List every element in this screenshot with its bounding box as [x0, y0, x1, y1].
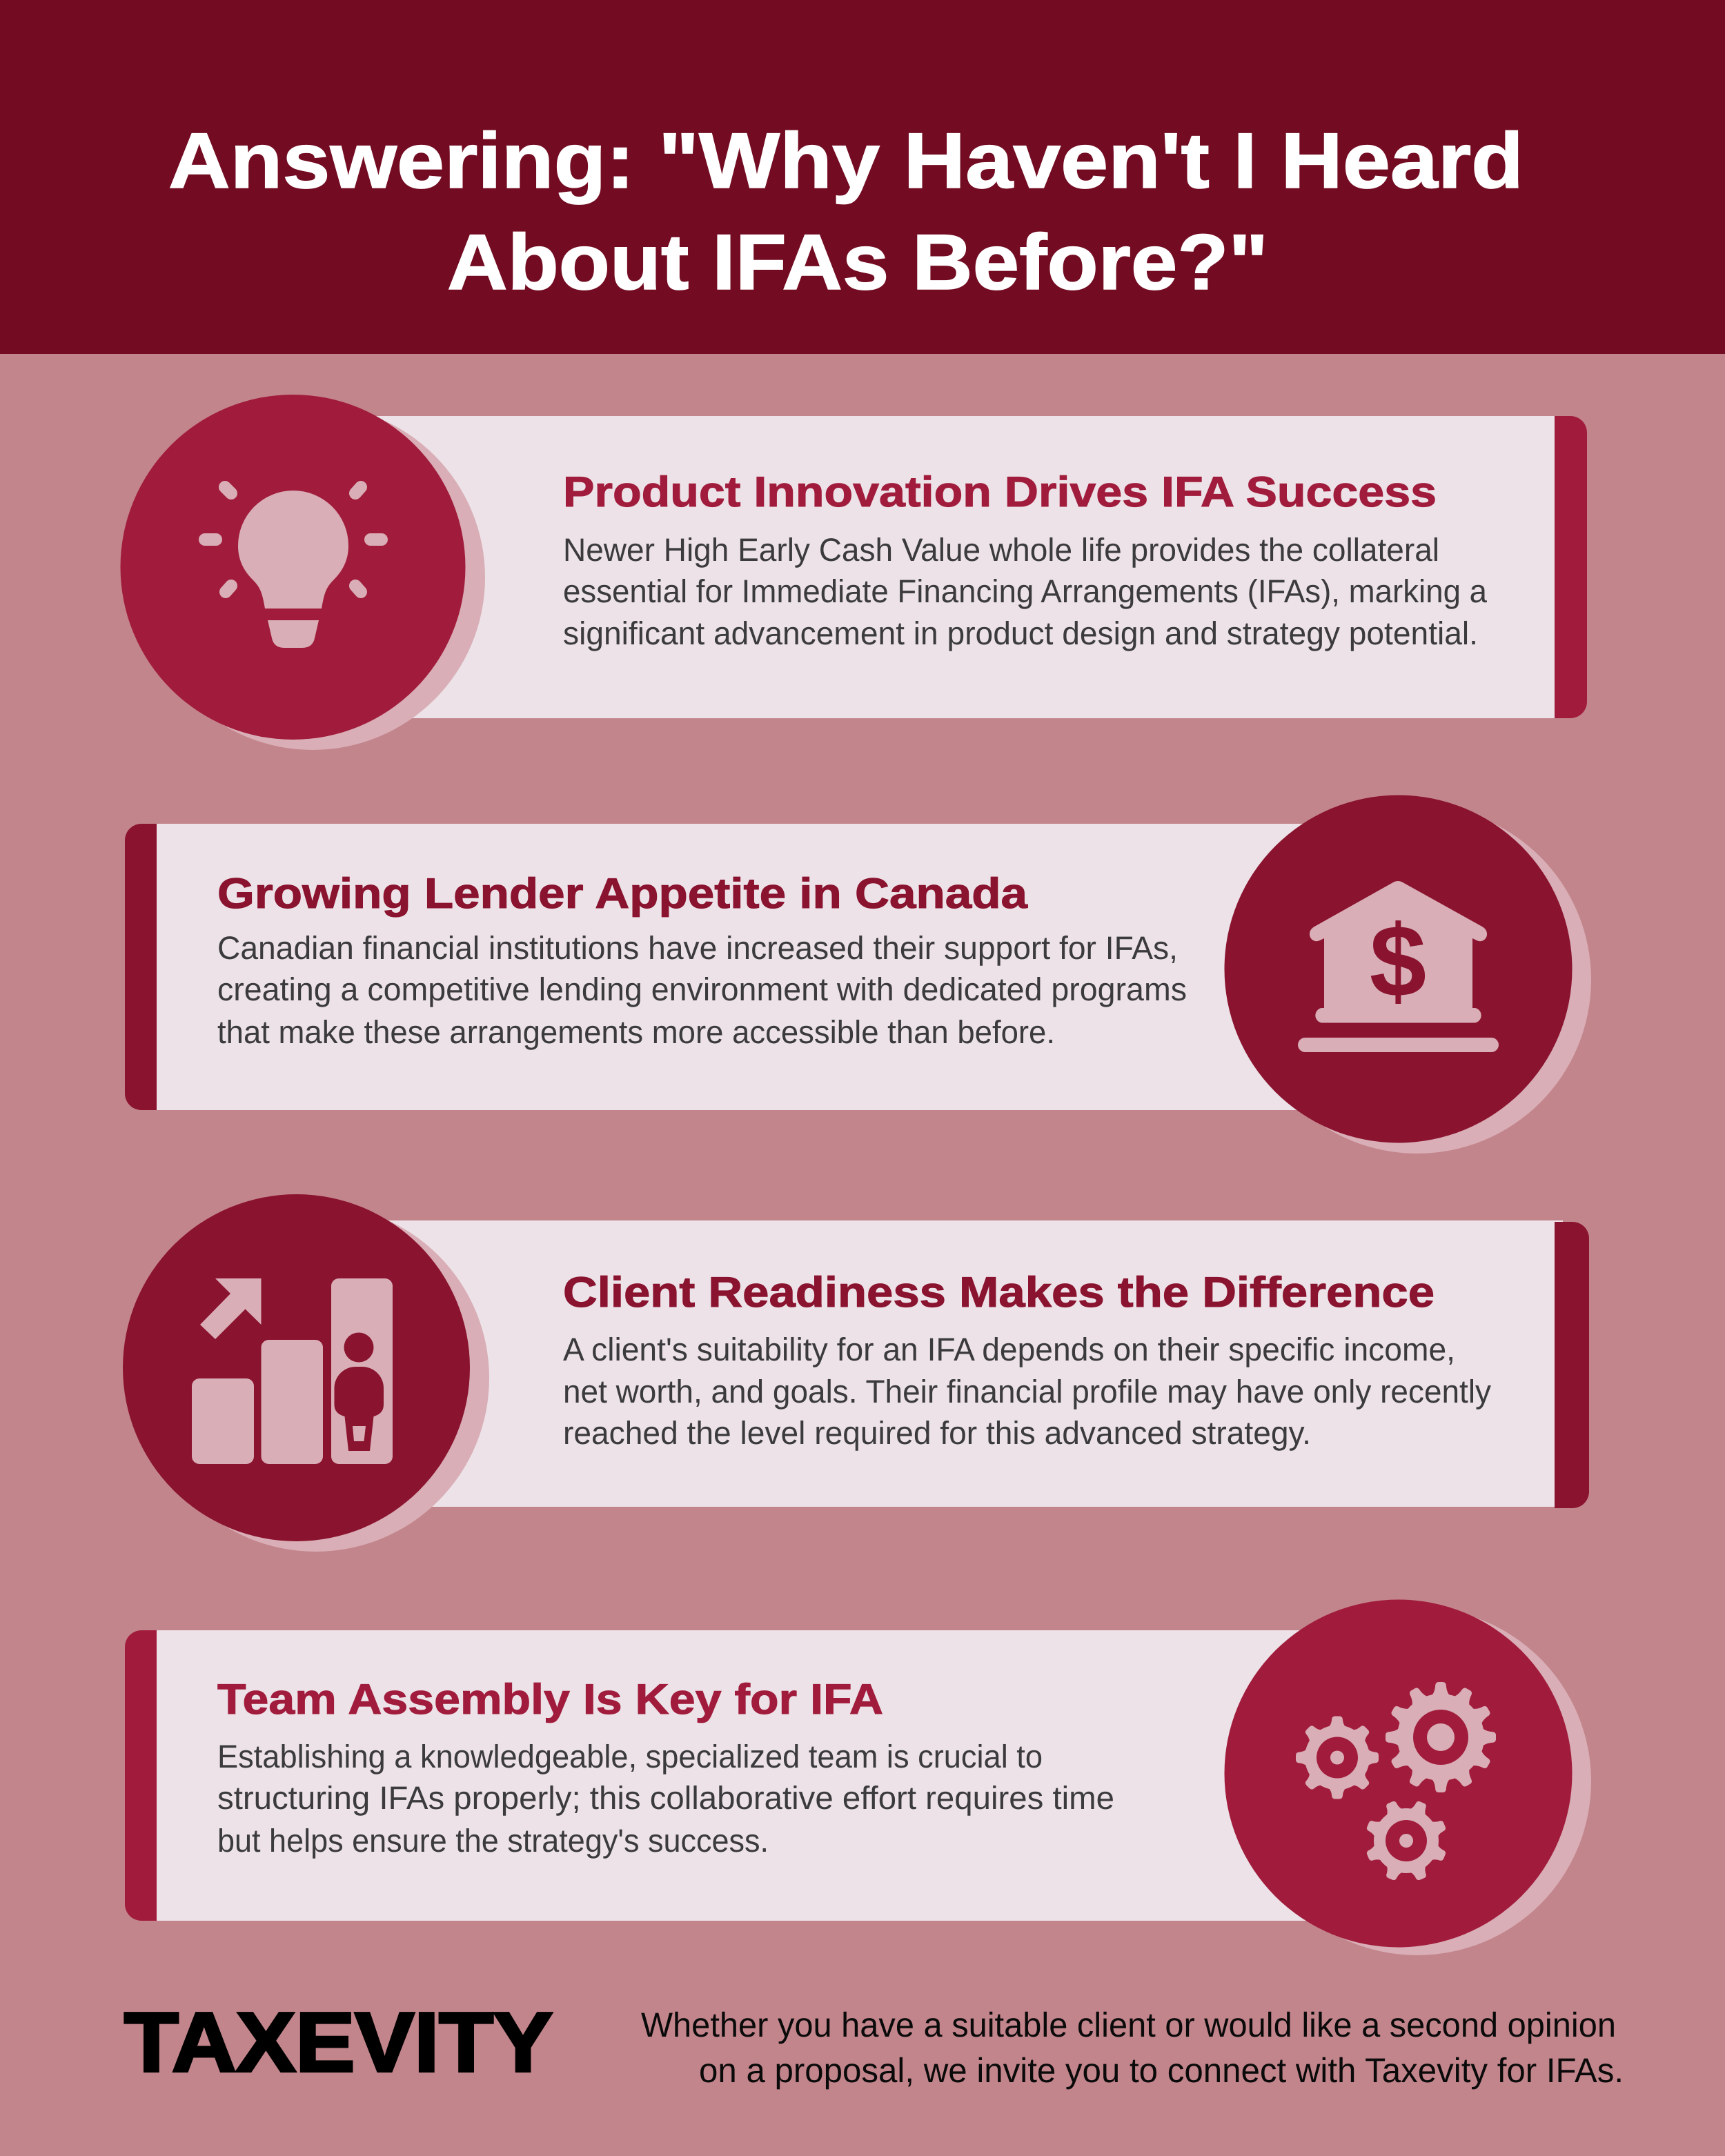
icon: bank with dollar [1298, 881, 1499, 1052]
body text: A client's suitability for an IFA depends on their specific income, [563, 1331, 1455, 1367]
footer call to action [641, 2006, 1624, 2090]
circle shadow [1243, 806, 1591, 1154]
circle shadow [140, 405, 485, 750]
icon: light bulb [205, 487, 382, 648]
heading: Growing Lender Appetite in Canada [217, 870, 1028, 918]
circle [1224, 795, 1572, 1143]
card accent bar [125, 824, 157, 1110]
circle [1224, 1599, 1572, 1947]
icon: bank with dollar: $ [1370, 904, 1426, 1018]
circle [123, 1194, 470, 1541]
card accent bar [125, 1630, 157, 1921]
panel: team assembly [125, 1599, 1591, 1955]
body text: Newer High Early Cash Value whole life provides the collateral [563, 531, 1439, 568]
panel: product innovation [120, 395, 1587, 750]
title: About IFAs Before?" [447, 219, 1268, 306]
icon: growth bars with person [192, 1278, 393, 1464]
card background [148, 1630, 1401, 1921]
header banner with title [0, 0, 1725, 354]
body text: but helps ensure the strategy's success. [217, 1822, 769, 1859]
heading: Client Readiness Makes the Difference [563, 1269, 1435, 1316]
body text: Canadian financial institutions have increased their support for IFAs, [217, 929, 1178, 966]
body text: structuring IFAs properly; this collaborative effort requires time [217, 1779, 1114, 1816]
body text [563, 1331, 1491, 1451]
circle [120, 395, 465, 740]
body text: that make these arrangements more accessible than before. [217, 1013, 1055, 1050]
body text [563, 531, 1488, 651]
footer call to action: Whether you have a suitable client or would like a second opinion [641, 2006, 1616, 2044]
card background [293, 416, 1562, 718]
body text: Establishing a knowledgeable, specialized team is crucial to [217, 1738, 1043, 1774]
title: Answering: "Why Haven't I Heard [168, 117, 1524, 205]
body text: reached the level required for this advanced strategy. [563, 1414, 1311, 1451]
body text: creating a competitive lending environment with dedicated programs [217, 971, 1187, 1007]
panel: client readiness [123, 1194, 1589, 1552]
title [168, 117, 1524, 306]
heading: Product Innovation Drives IFA Success [563, 468, 1437, 516]
footer call to action: on a proposal, we invite you to connect with Taxevity for IFAs. [699, 2051, 1624, 2090]
body text: essential for Immediate Financing Arrangements (IFAs), marking a [563, 573, 1488, 609]
heading: Team Assembly Is Key for IFA [217, 1676, 883, 1723]
card accent bar [1555, 1222, 1589, 1508]
card accent bar [1555, 416, 1587, 718]
card background [297, 1220, 1563, 1507]
circle shadow [142, 1205, 489, 1552]
logo: Taxevity wordmark: TAXEVITY [124, 1995, 553, 2089]
card background [148, 824, 1401, 1110]
panel: lender appetite [125, 795, 1591, 1154]
body text [217, 929, 1187, 1050]
body text: significant advancement in product design and strategy potential. [563, 615, 1478, 651]
icon: gears [1296, 1682, 1496, 1883]
body text [217, 1738, 1114, 1859]
body text: net worth, and goals. Their financial profile may have only recently [563, 1373, 1491, 1410]
circle shadow [1243, 1608, 1591, 1955]
